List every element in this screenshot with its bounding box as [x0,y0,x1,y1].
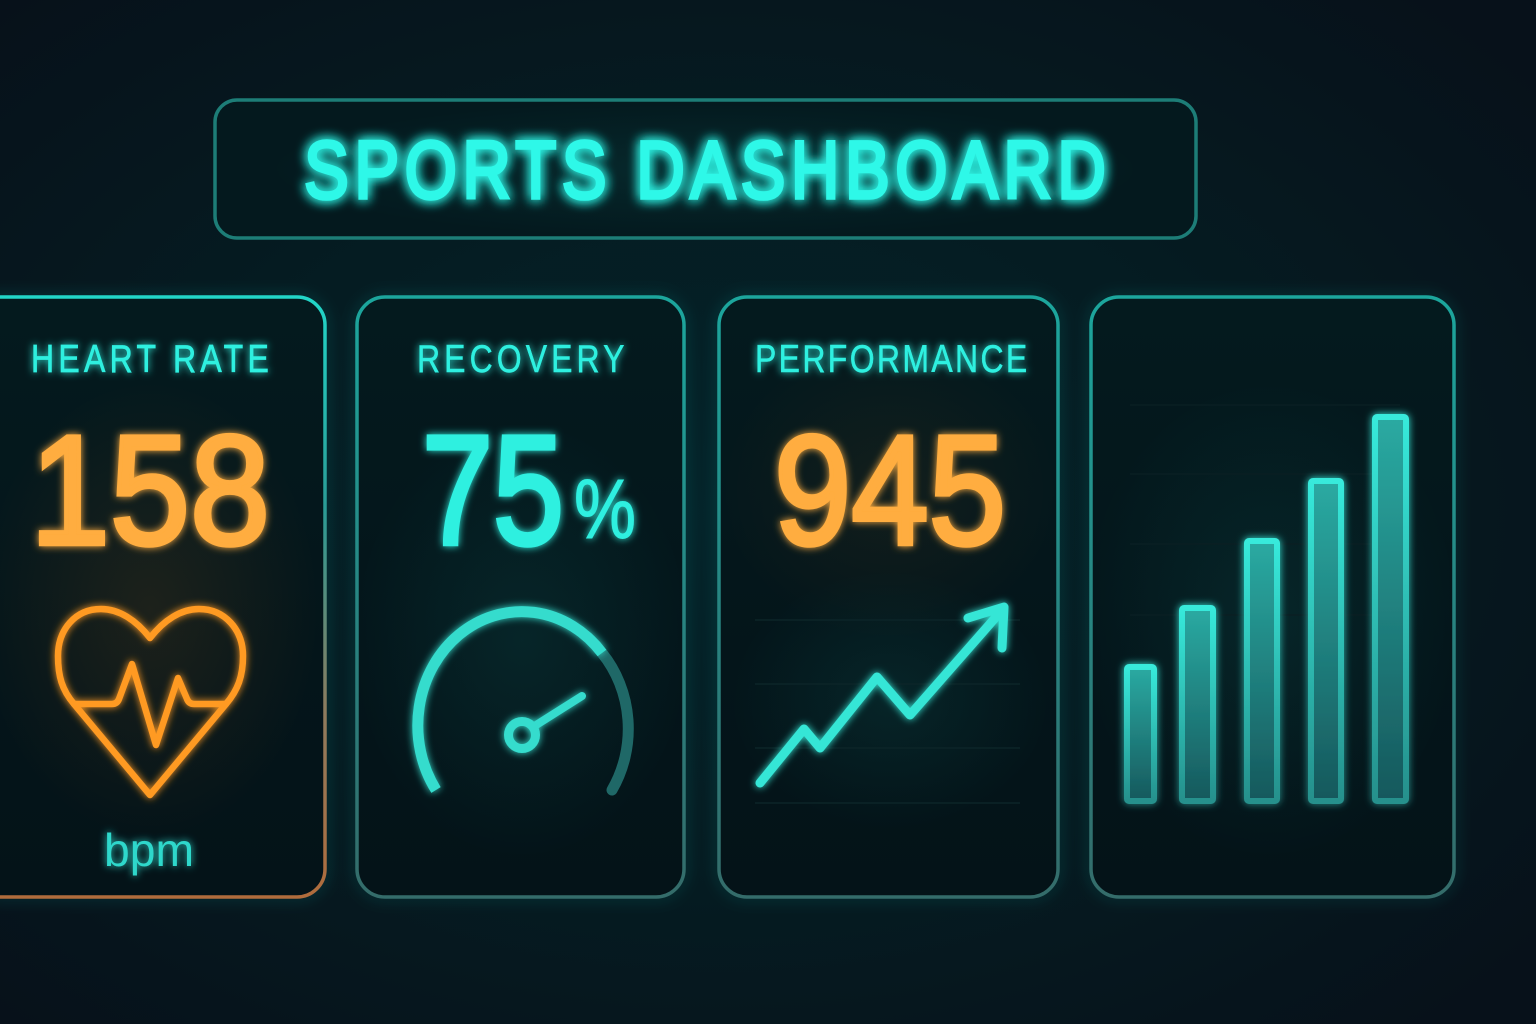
panel: bar chart [1080,297,1460,897]
bar 2 [1182,608,1213,801]
bar 3 [1247,541,1277,801]
recovery value: 75 [422,404,564,578]
percent sign: % [574,462,636,556]
title banner [215,99,1196,239]
panel: recovery [352,297,692,897]
bpm unit: bpm [104,824,194,876]
bar chart [1127,417,1406,801]
panel: performance [719,297,1060,897]
bar 5 [1375,417,1406,801]
recovery label: RECOVERY [417,337,624,381]
performance label: PERFORMANCE [755,337,1027,381]
icon: heart with pulse [58,609,243,795]
performance value: 945 [774,404,1006,578]
heart rate value: 158 [30,404,270,578]
bar 4 [1311,481,1341,801]
panel: heart rate [0,297,325,897]
icon: rising trend arrow [760,607,1004,783]
icon: gauge [418,612,628,790]
bar 1 [1127,667,1154,801]
heart rate label: HEART RATE [31,337,269,381]
title: SPORTS DASHBOARD [304,124,1106,215]
